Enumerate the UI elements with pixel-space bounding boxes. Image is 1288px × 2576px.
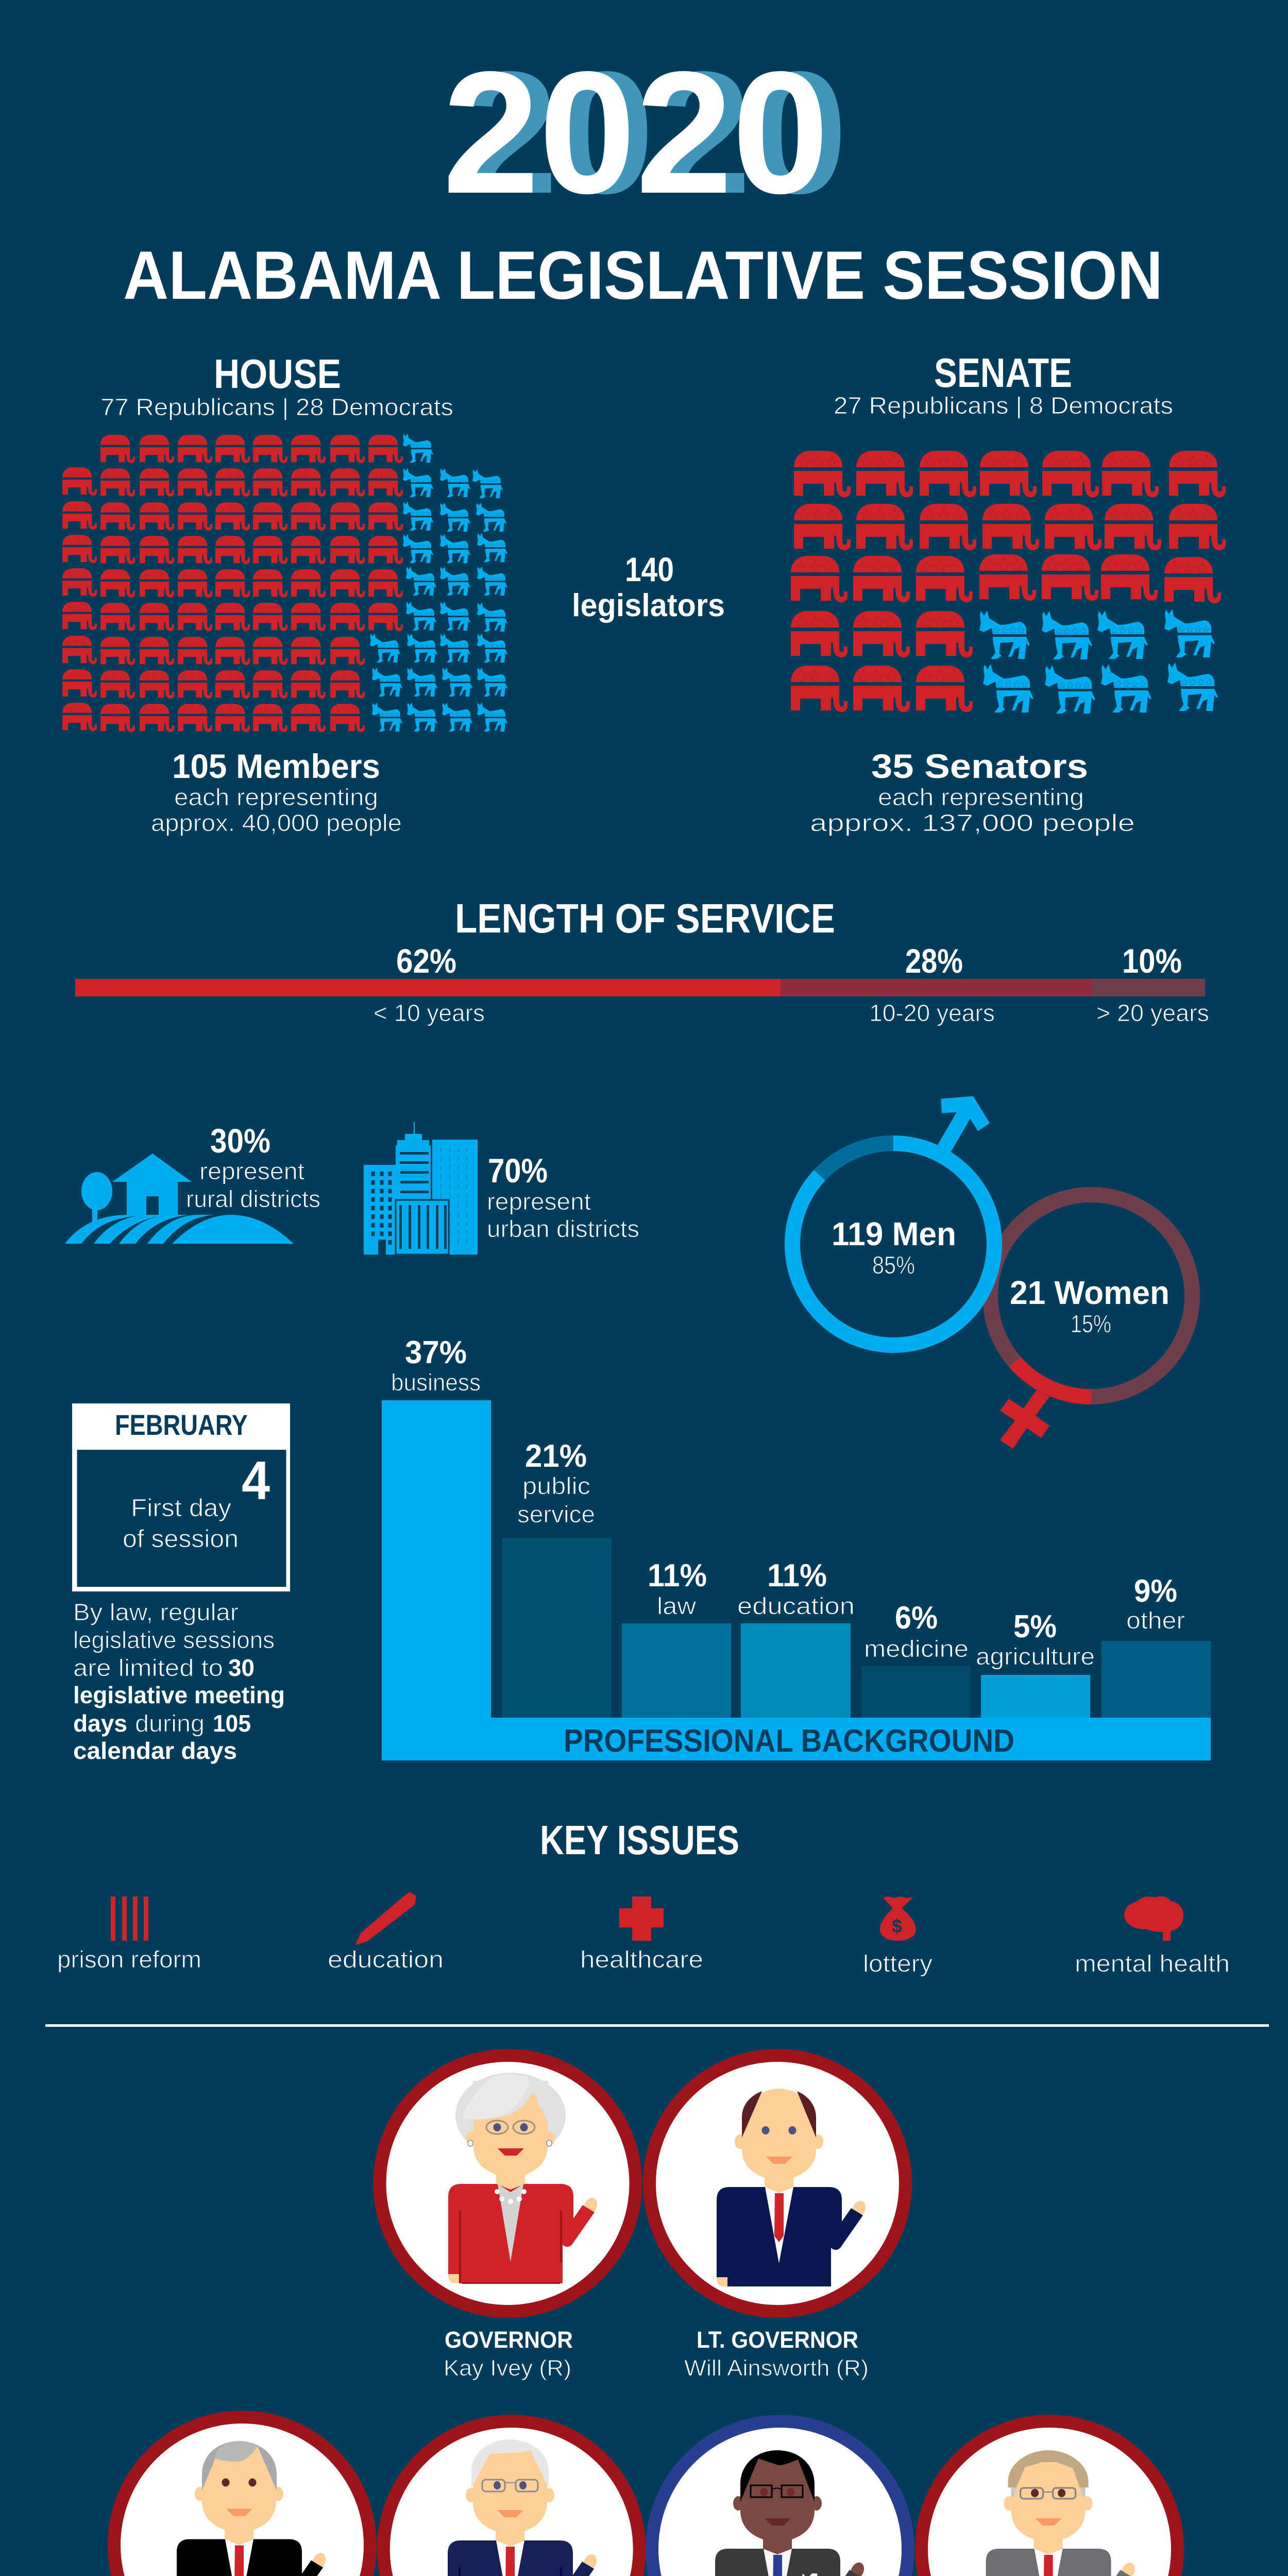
men count: 119 Men <box>832 1215 956 1252</box>
house totals: each representing <box>174 784 378 810</box>
senate totals: approx. 137,000 people <box>810 809 1135 836</box>
bar: law <box>622 1558 731 1718</box>
calendar note: First day <box>131 1495 231 1522</box>
callout: 140 legislators: legislators <box>572 588 725 623</box>
president pro tem: Del Marsh <box>114 2417 370 2576</box>
stat: 30% rural: 30% <box>210 1122 270 1160</box>
women count: 21 Women <box>1010 1274 1170 1311</box>
senate elephants: 27 Republicans <box>791 451 1226 712</box>
stat: 70% urban: 70% <box>488 1151 548 1190</box>
house party split: 77 Republicans | 28 Democrats <box>100 394 453 420</box>
icon: rural farm <box>65 1154 294 1244</box>
issue: education <box>328 1892 444 1973</box>
bar: business: 37% <box>405 1335 467 1370</box>
bar: public service <box>502 1438 612 1718</box>
stat: 70% urban: urban districts <box>487 1215 639 1242</box>
title: Alabama Legislative Session: ALABAMA LEGISLATIVE SESSION <box>123 238 1163 314</box>
stat: 30% rural: rural districts <box>186 1185 320 1212</box>
bar: public service: service <box>517 1501 595 1528</box>
service percentages: 28% <box>905 942 963 980</box>
governor: Kay Ivey: GOVERNOR <box>445 2327 573 2353</box>
panel: calendar <box>72 1403 290 1591</box>
bar: education: education <box>737 1592 855 1619</box>
women count: 15% <box>1071 1311 1111 1338</box>
men count <box>832 1215 956 1279</box>
calendar month: FEBRUARY <box>115 1409 248 1441</box>
chart: professional background <box>382 1335 1211 1760</box>
text block: session rules <box>73 1599 285 1764</box>
issue: healthcare <box>580 1896 703 1973</box>
title: 2020: 0 <box>557 35 654 230</box>
callout: 140 legislators <box>572 550 725 623</box>
bar: education <box>737 1558 855 1718</box>
heading: key issues: KEY ISSUES <box>540 1817 739 1863</box>
bar: agriculture <box>976 1609 1095 1718</box>
issue: prison reform: prison reform <box>57 1946 201 1973</box>
service percentages: 62% <box>396 942 456 980</box>
house totals: 105 Members <box>172 747 380 785</box>
issue: lottery: lottery <box>863 1950 933 1977</box>
text block: session rules: legislative meeting <box>73 1682 285 1708</box>
title: 2020: 0 <box>539 35 636 230</box>
service range labels: > 20 years <box>1096 999 1209 1026</box>
service range labels: < 10 years <box>374 999 485 1026</box>
senate minority leader: Bobby Singleton <box>652 2421 908 2576</box>
icon: city skyline <box>364 1122 478 1255</box>
bar: public service: public <box>522 1472 590 1499</box>
text block: session rules: days <box>73 1710 127 1737</box>
calendar day: 4 <box>242 1450 270 1511</box>
bar: medicine: 6% <box>895 1600 938 1636</box>
senate totals <box>810 747 1135 836</box>
title: 2020: 2 <box>654 35 751 230</box>
women symbol <box>990 1195 1192 1449</box>
bar: other: other <box>1126 1607 1185 1634</box>
callout: 140 legislators: 140 <box>625 550 674 588</box>
bar: business <box>382 1335 491 1718</box>
issue: mental health <box>1075 1896 1230 1977</box>
text block: session rules: are limited to <box>73 1654 223 1681</box>
governor: Kay Ivey <box>380 2056 636 2381</box>
issue: mental health: mental health <box>1075 1950 1230 1977</box>
calendar note: of session <box>123 1526 239 1553</box>
bar: other: 9% <box>1134 1573 1177 1609</box>
women count <box>1010 1274 1170 1338</box>
bar: public service: 21% <box>525 1438 587 1474</box>
panel: length of service <box>75 895 1209 1026</box>
stat: 70% urban: represent <box>487 1188 591 1215</box>
heading: senate: SENATE <box>934 350 1072 396</box>
senate donkeys: 8 Democrats <box>979 609 1218 714</box>
house totals: approx. 40,000 people <box>151 809 402 836</box>
service percentages <box>396 942 1182 980</box>
bar: medicine: medicine <box>864 1635 969 1662</box>
bar: agriculture: 5% <box>1013 1609 1057 1645</box>
senate totals: each representing <box>878 784 1084 810</box>
text block: session rules: legislative sessions <box>73 1626 275 1653</box>
house totals <box>151 747 402 836</box>
bar: business: business <box>391 1369 481 1396</box>
text block: session rules: calendar days <box>73 1737 237 1764</box>
chart base and title: PROFESSIONAL BACKGROUND <box>564 1723 1014 1759</box>
issue: lottery <box>863 1896 933 1977</box>
stat: 70% urban <box>487 1151 639 1242</box>
text block: session rules: By law, regular <box>73 1599 239 1625</box>
lt governor: Will Ainsworth <box>649 2056 906 2381</box>
men symbol <box>792 1096 994 1345</box>
title: 2020: 0 <box>732 35 829 230</box>
text block: session rules: during <box>135 1710 205 1737</box>
chart: gender rings <box>792 1096 1192 1449</box>
title: 2020: 2 <box>461 35 558 230</box>
text block: session rules: 105 <box>213 1710 251 1737</box>
heading: length of service: LENGTH OF SERVICE <box>455 895 835 941</box>
lt governor: Will Ainsworth: Will Ainsworth (R) <box>684 2355 869 2381</box>
house donkeys: 28 Democrats <box>370 433 507 732</box>
bar: education: 11% <box>767 1558 827 1594</box>
heading: house: HOUSE <box>214 351 341 397</box>
title: 2020: 0 <box>751 35 848 230</box>
men count: 85% <box>872 1252 915 1279</box>
governor: Kay Ivey: Kay Ivey (R) <box>444 2355 571 2381</box>
issue: lottery: $ <box>892 1916 902 1937</box>
senate majority leader: Greg Reed <box>383 2421 639 2576</box>
stacked service bar <box>75 979 1205 996</box>
service range labels: 10-20 years <box>869 999 995 1026</box>
text block: session rules: 30 <box>228 1654 255 1681</box>
issue: healthcare: healthcare <box>580 1946 703 1973</box>
bar: medicine <box>861 1600 970 1718</box>
stat: 30% rural <box>186 1122 320 1212</box>
calendar note <box>123 1495 239 1553</box>
issue: prison reform <box>57 1896 201 1973</box>
stat: 30% rural: represent <box>199 1158 304 1184</box>
title: 2020: 2 <box>443 35 539 230</box>
panel: senate <box>791 350 1226 836</box>
title: 2020 <box>443 35 848 230</box>
senate party split: 27 Republicans | 8 Democrats <box>834 392 1173 419</box>
service range labels <box>374 999 1209 1026</box>
title: 2020: 2 <box>636 35 733 230</box>
issue: education: education <box>328 1946 444 1973</box>
panel: house <box>62 351 507 836</box>
lt governor: Will Ainsworth: LT. GOVERNOR <box>697 2327 858 2353</box>
house elephants: 77 Republicans <box>62 435 403 732</box>
bar: agriculture: agriculture <box>976 1643 1095 1670</box>
service percentages: 10% <box>1122 942 1182 980</box>
senate rules chair: Jabo Waggoner <box>921 2421 1178 2576</box>
bar: other <box>1101 1573 1211 1718</box>
senate totals: 35 Senators <box>871 747 1088 785</box>
bar: law: 11% <box>648 1558 707 1594</box>
panel: key issues <box>57 1817 1230 1977</box>
bar: law: law <box>657 1592 697 1619</box>
chart base and title <box>382 1718 1211 1760</box>
